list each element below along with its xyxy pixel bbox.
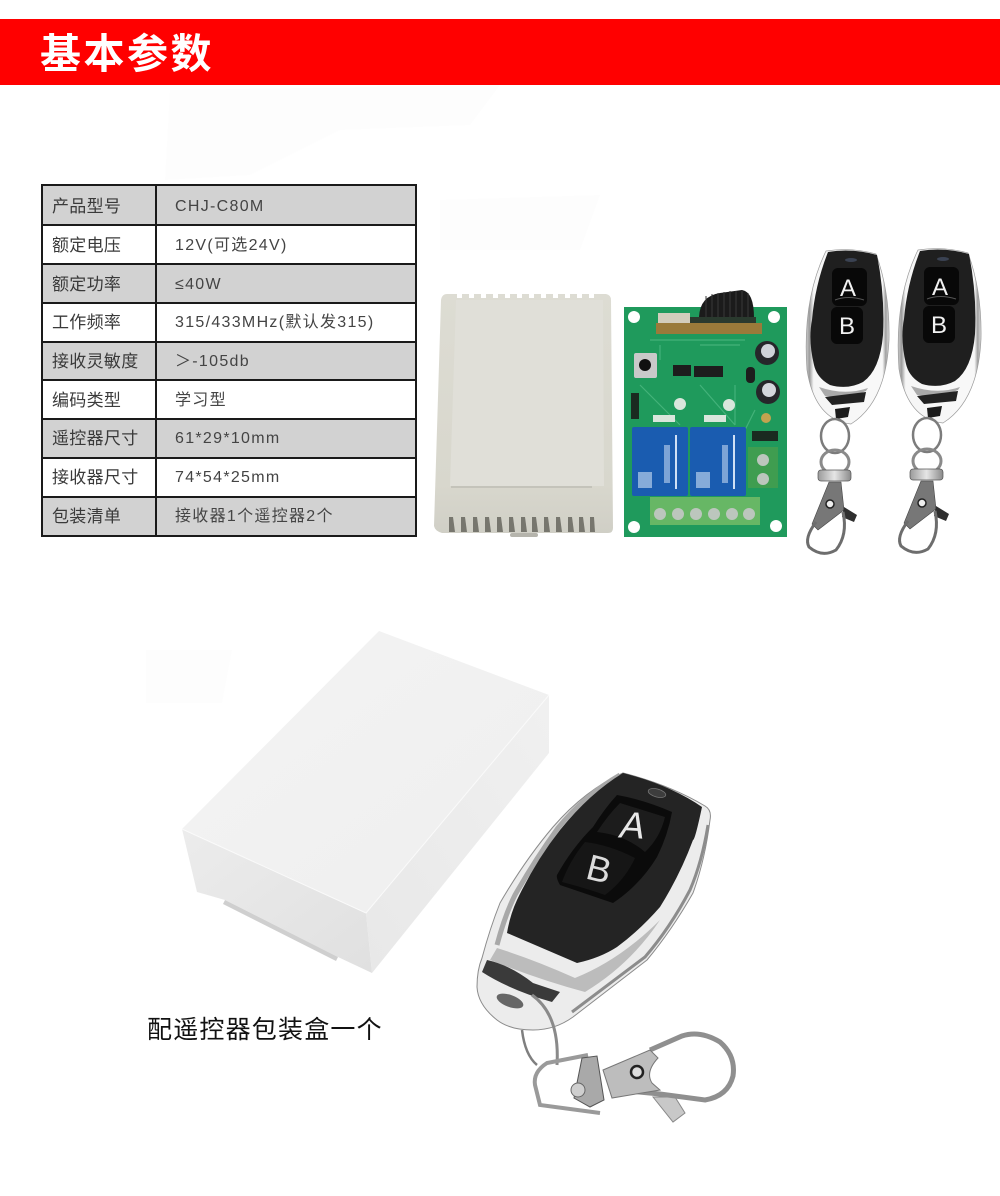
row: receiver size: 74*54*25mm bbox=[175, 469, 280, 486]
row: model bbox=[52, 197, 265, 216]
parameter table bbox=[42, 185, 416, 536]
row: code type bbox=[52, 391, 227, 410]
row: package list bbox=[52, 507, 334, 526]
row: code type: 编码类型 bbox=[52, 391, 121, 410]
row: package list: 包装清单 bbox=[52, 507, 121, 526]
row: model: CHJ-C80M bbox=[175, 198, 265, 215]
chrome band shading bbox=[490, 920, 660, 992]
button B bbox=[562, 842, 635, 895]
button group bbox=[557, 795, 672, 903]
row: rated power bbox=[52, 275, 222, 294]
left chrome stripe bbox=[497, 775, 620, 945]
row: package list: 接收器1个遥控器2个 bbox=[175, 507, 334, 525]
back of key ring bbox=[522, 1030, 537, 1065]
output terminal strip bbox=[650, 497, 760, 525]
small remote right: A bbox=[932, 274, 948, 301]
label A: A bbox=[616, 804, 651, 846]
hanger hole bbox=[495, 991, 525, 1011]
row: frequency: 315/433MHz(默认发315) bbox=[175, 313, 374, 331]
small remote left: B bbox=[839, 313, 855, 340]
row: remote size: 61*29*10mm bbox=[175, 430, 280, 447]
key ring front bbox=[532, 995, 557, 1065]
receiver circuit board bbox=[624, 290, 787, 537]
row: receiver size: 接收器尺寸 bbox=[52, 468, 138, 487]
caption: 配遥控器包装盒一个 bbox=[147, 1016, 383, 1044]
row: rated power: 额定功率 bbox=[52, 275, 121, 294]
label B: B bbox=[582, 846, 616, 892]
capacitors bbox=[755, 341, 780, 404]
antenna coil bbox=[699, 290, 754, 318]
small remote right bbox=[898, 249, 981, 552]
small remote right: B bbox=[931, 312, 947, 339]
right chrome stripe bbox=[572, 825, 708, 1012]
black face bbox=[507, 773, 702, 963]
row: code type: 学习型 bbox=[175, 391, 227, 409]
LED bbox=[647, 787, 667, 799]
large remote control bbox=[477, 773, 733, 1122]
row: rated voltage: 12V(可选24V) bbox=[175, 236, 288, 254]
row: rated power: ≤40W bbox=[175, 276, 222, 293]
small remote left: A bbox=[840, 275, 856, 302]
push button bbox=[634, 353, 657, 378]
row: frequency bbox=[52, 313, 374, 332]
chips bbox=[673, 365, 755, 383]
faint background patch bbox=[146, 85, 600, 703]
button A bbox=[597, 803, 665, 852]
row: model: 产品型号 bbox=[52, 197, 121, 216]
row: sensitivity: ＞-105db bbox=[175, 353, 250, 370]
row: remote size bbox=[52, 429, 280, 448]
row: sensitivity: 接收灵敏度 bbox=[52, 352, 138, 371]
radio module bbox=[656, 313, 762, 334]
row: frequency: 工作频率 bbox=[52, 313, 121, 332]
relays bbox=[632, 427, 746, 496]
header banner bbox=[0, 19, 1000, 85]
row: rated voltage bbox=[52, 236, 288, 255]
white packaging box bbox=[182, 631, 549, 973]
heading: 基本参数 bbox=[40, 31, 214, 77]
receiver enclosure bbox=[434, 293, 613, 537]
row: rated voltage: 额定电压 bbox=[52, 236, 121, 255]
row: receiver size bbox=[52, 468, 280, 487]
chrome reflection bbox=[482, 960, 560, 1002]
small remote left bbox=[806, 250, 889, 553]
row: remote size: 遥控器尺寸 bbox=[52, 429, 138, 448]
power terminal bbox=[748, 447, 778, 488]
small parts bbox=[631, 393, 778, 441]
chrome shell bbox=[477, 773, 710, 1030]
row: sensitivity bbox=[52, 352, 250, 371]
clasp bbox=[535, 1034, 733, 1122]
